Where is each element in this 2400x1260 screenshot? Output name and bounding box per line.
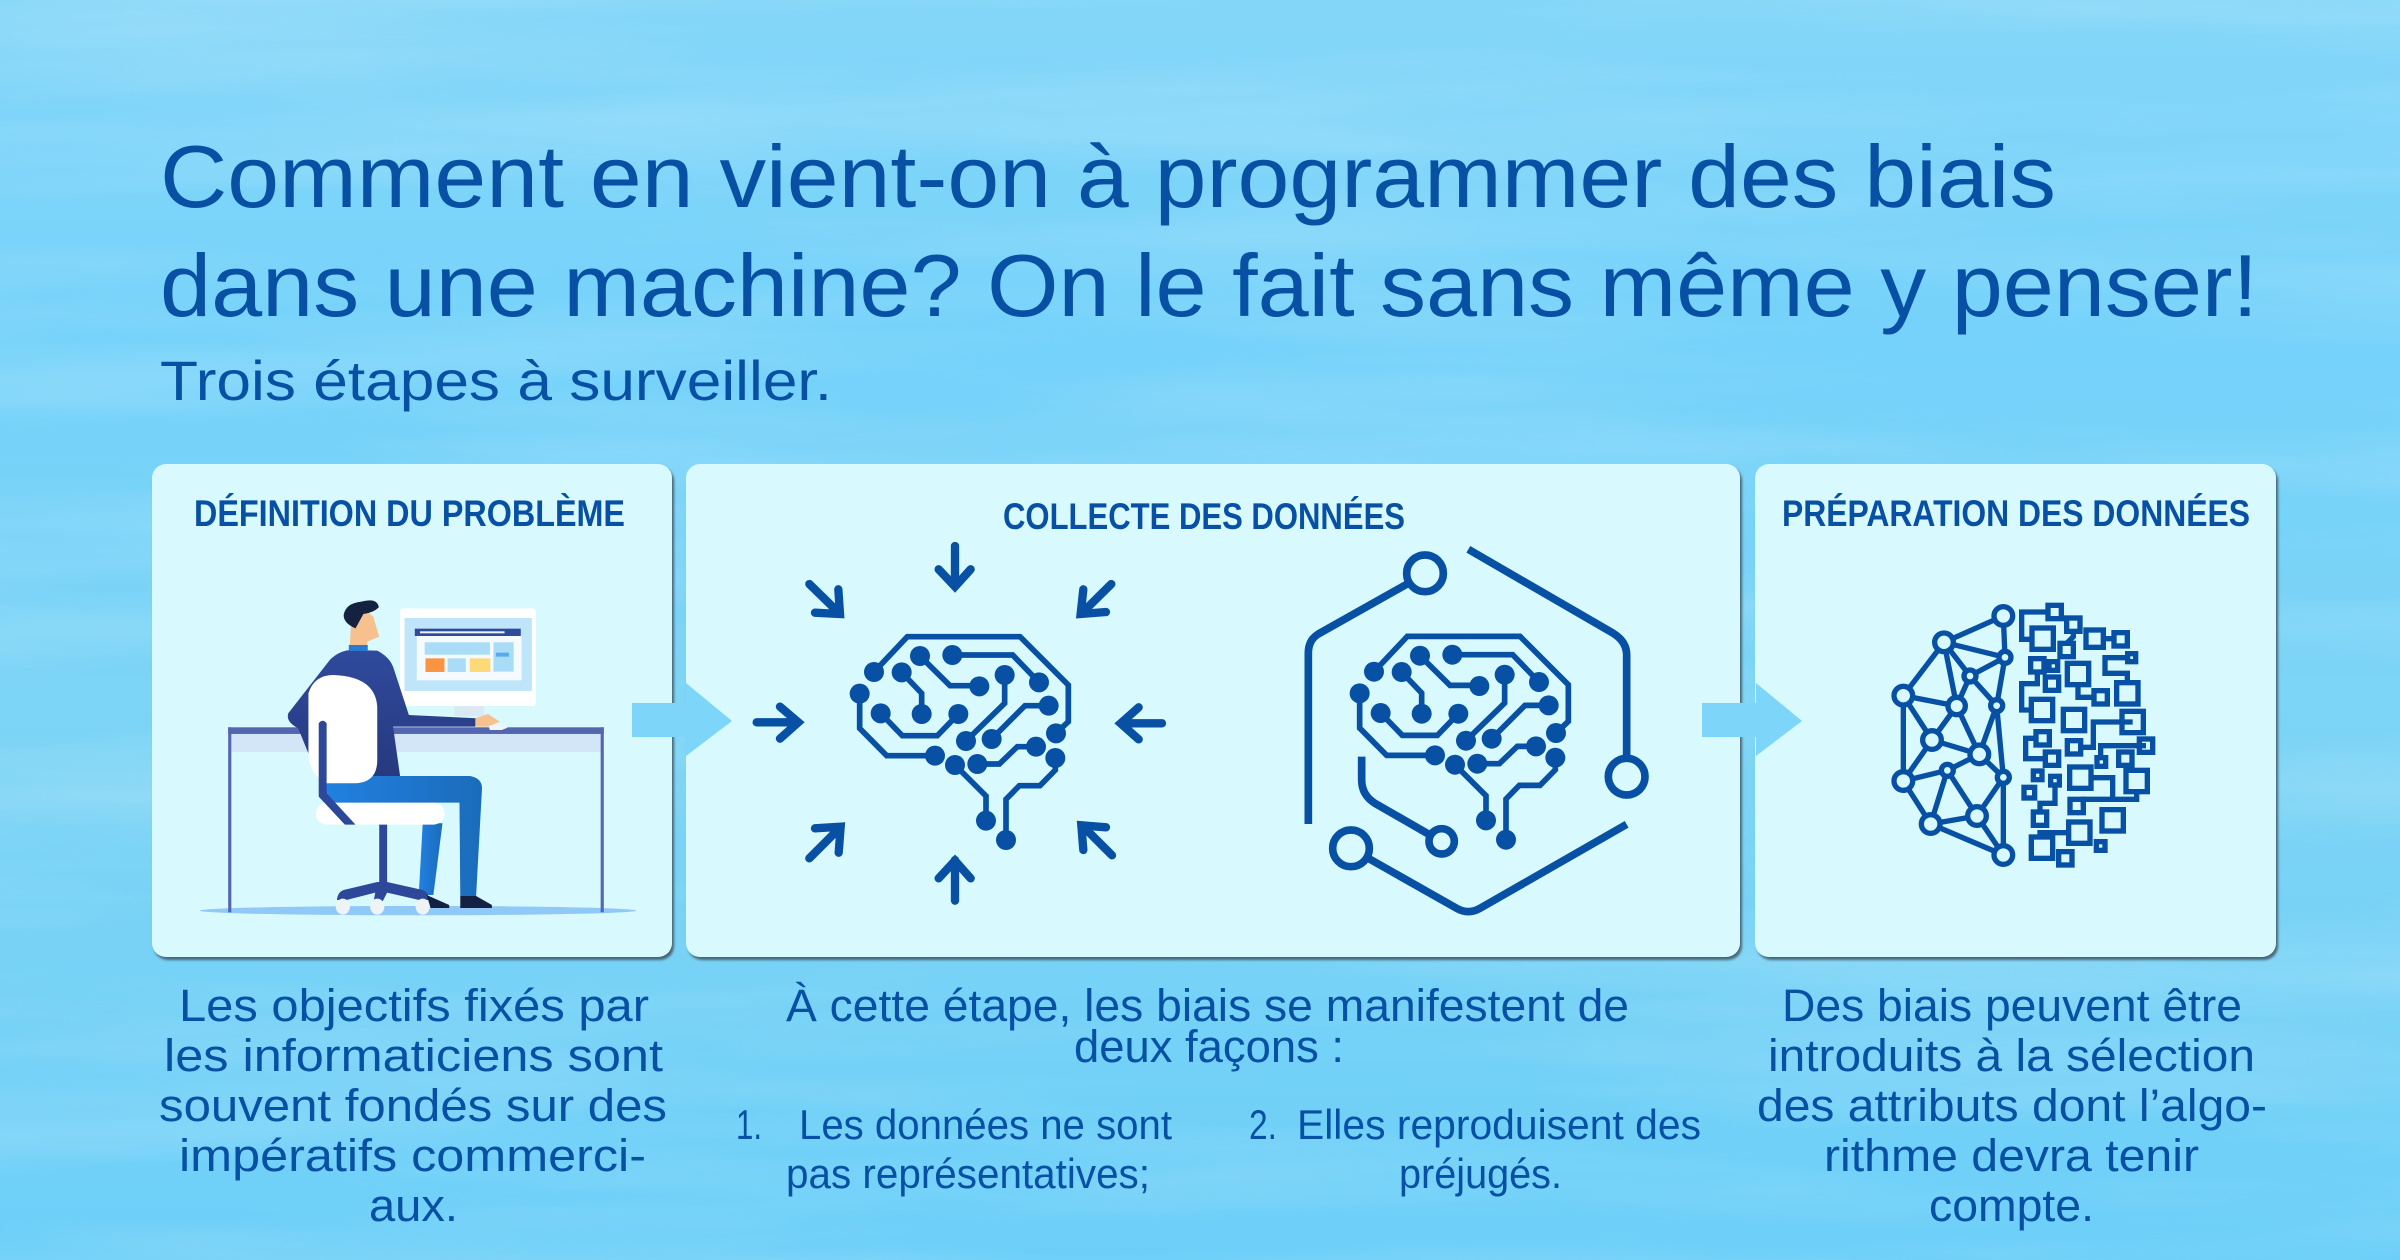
- text block: problem definition description: souvent fondés sur des: [159, 1080, 667, 1131]
- text block: data collection introduction: deux façons :: [1074, 1021, 1344, 1072]
- panel: préparation des données: [1755, 464, 2276, 957]
- panel: collecte des données: [686, 464, 1740, 957]
- text block: problem definition description: impératifs commerci-: [179, 1130, 646, 1181]
- text block: second way: Elles reproduisent des: [1297, 1101, 1701, 1148]
- subtitle: Trois étapes à surveiller.: [160, 349, 832, 412]
- text block: first way: Les données ne sont: [799, 1101, 1172, 1148]
- text block: data preparation description: introduits à la sélection: [1768, 1030, 2255, 1081]
- heading: définition du problème: DÉFINITION DU PROBLÈME: [194, 493, 625, 534]
- arrow: from problem definition to data collection: [632, 683, 732, 756]
- icon: brain in circuit hexagon: [1308, 549, 1645, 912]
- arrow: from data collection to data preparation: [1702, 683, 1802, 756]
- icon: half neural network half circuit brain: [1894, 605, 2153, 865]
- icon: brain with incoming arrows: [757, 546, 1162, 901]
- illustration: person at a desk with a computer: [200, 600, 636, 915]
- ground shadow: [200, 906, 636, 915]
- monitor: [400, 608, 536, 716]
- desk: [228, 727, 604, 912]
- text block: first way: [736, 1101, 1172, 1197]
- shoes: [427, 895, 492, 908]
- text block: data preparation description: Des biais peuvent être: [1782, 980, 2242, 1031]
- chair back: [308, 675, 377, 825]
- torso: [288, 650, 476, 777]
- chair seat: [316, 803, 444, 825]
- text block: first way: pas représentatives;: [786, 1150, 1150, 1197]
- circuit hexagon: [1308, 549, 1645, 912]
- text block: data preparation description: compte.: [1929, 1180, 2094, 1231]
- text block: data collection introduction: [786, 980, 1629, 1072]
- neural network half: [1894, 607, 2013, 864]
- circuit squares half: [2022, 605, 2153, 865]
- text block: problem definition description: [159, 980, 667, 1231]
- text block: data collection introduction: À cette étape, les biais se manifestent de: [786, 980, 1629, 1031]
- thigh and front leg: [326, 776, 482, 896]
- text block: second way: préjugés.: [1399, 1150, 1562, 1197]
- chair base: [336, 823, 430, 915]
- panel: définition du problème: [152, 464, 672, 957]
- incoming arrows: [757, 546, 1162, 901]
- text block: first way: 1.: [736, 1101, 762, 1148]
- title: [160, 127, 2258, 335]
- text block: problem definition description: aux.: [369, 1180, 458, 1231]
- heading: préparation des données: PRÉPARATION DES DONNÉES: [1782, 493, 2250, 534]
- text block: problem definition description: Les objectifs fixés par: [179, 980, 649, 1031]
- text block: data preparation description: [1757, 980, 2267, 1231]
- text block: problem definition description: les informaticiens sont: [164, 1030, 664, 1081]
- text block: data preparation description: des attributs dont l’algo-: [1757, 1080, 2267, 1131]
- title: dans une machine? On le fait sans même y penser!: [160, 236, 2258, 335]
- title: Comment en vient-on à programmer des biais: [160, 127, 2056, 226]
- text block: data preparation description: rithme devra tenir: [1824, 1130, 2199, 1181]
- text block: second way: 2.: [1249, 1101, 1277, 1148]
- back leg: [419, 823, 442, 895]
- text block: second way: [1249, 1101, 1701, 1197]
- heading: collecte des données: COLLECTE DES DONNÉES: [1003, 496, 1405, 537]
- hand and mouse: [475, 714, 508, 730]
- neck and head: [344, 600, 379, 651]
